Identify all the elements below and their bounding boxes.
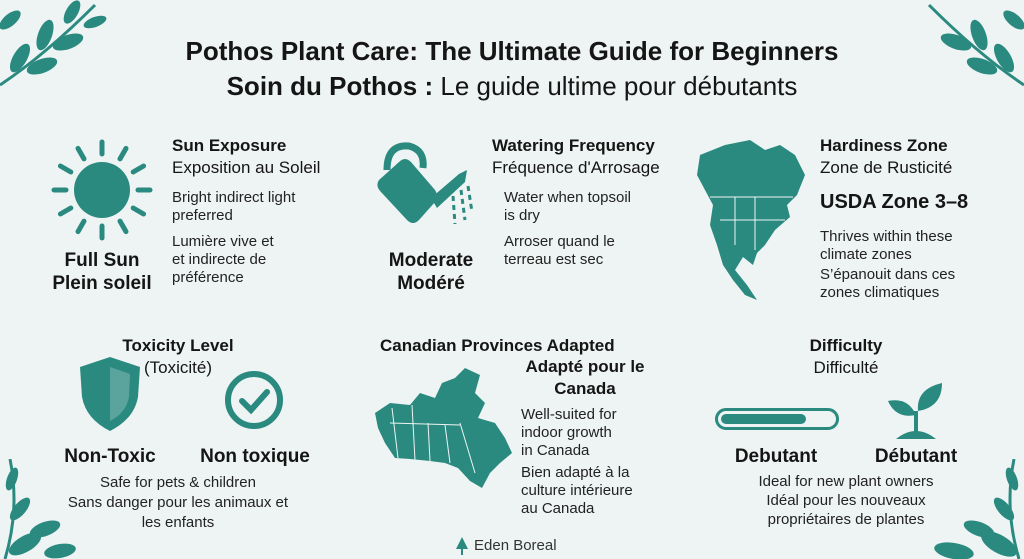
panel: sun exposure: préférence	[172, 269, 244, 286]
heading: Watering Frequency	[492, 136, 655, 155]
heading	[820, 136, 952, 177]
title: Pothos Plant Care: The Ultimate Guide for Beginners	[186, 36, 838, 66]
icon: sprout	[888, 383, 942, 439]
heading: (Toxicité)	[144, 358, 212, 377]
title	[186, 36, 838, 101]
label: full sun: Plein soleil	[52, 273, 152, 294]
panel: sun exposure: Lumière vive et	[172, 233, 274, 250]
panel: watering	[377, 136, 660, 294]
panel: hardiness zone: S’épanouit dans ces	[820, 266, 955, 283]
body text: propriétaires de plantes	[768, 511, 924, 528]
body text: is dry	[504, 207, 540, 224]
body text	[521, 406, 617, 459]
panel: watering: terreau est sec	[504, 251, 603, 268]
panel: canada: Adapté pour le	[525, 357, 644, 376]
heading: Fréquence d'Arrosage	[492, 158, 660, 177]
body text	[758, 473, 934, 528]
panel: canada: Canada	[554, 379, 616, 398]
panel: watering: Arroser quand le	[504, 233, 615, 250]
body text: Sans danger pour les animaux et	[68, 494, 288, 511]
panel: hardiness zone: zones climatiques	[820, 284, 939, 301]
heading	[810, 336, 882, 377]
body text: Well-suited for	[521, 406, 617, 423]
label: full sun	[52, 250, 152, 294]
panel: canada: Bien adapté à la	[521, 464, 629, 481]
panel: canada	[375, 336, 644, 517]
zone value: USDA Zone 3–8	[820, 191, 968, 213]
icon: sun	[52, 140, 152, 240]
body text: Thrives within these	[820, 228, 953, 245]
panel: canada: culture intérieure	[521, 482, 633, 499]
decorative leaves: top-right	[928, 4, 1024, 86]
body text: Ideal for new plant owners	[758, 473, 934, 490]
heading: Toxicity Level	[122, 336, 234, 355]
decorative leaves: top-left	[0, 0, 106, 86]
body text: in Canada	[521, 442, 589, 459]
panel: sun exposure: et indirecte de	[172, 251, 266, 268]
body text: indoor growth	[521, 424, 612, 441]
heading: Sun Exposure	[172, 136, 286, 155]
body text: Safe for pets & children	[100, 474, 256, 491]
labels: Non-Toxic	[64, 446, 156, 467]
body text: les enfants	[142, 514, 214, 531]
title: Soin du Pothos : Le guide ultime pour débutants	[227, 71, 797, 101]
icon: tree	[456, 537, 468, 555]
body text: preferred	[172, 207, 233, 224]
panel: toxicity	[64, 336, 310, 531]
heading: Exposition au Soleil	[172, 158, 320, 177]
body text: Idéal pour les nouveaux	[766, 492, 926, 509]
panel: difficulty: Débutant	[875, 446, 957, 467]
progress bar	[715, 408, 839, 430]
labels: Debutant	[735, 446, 817, 467]
icon: check circle	[225, 371, 283, 429]
body text: climate zones	[820, 246, 912, 263]
label: moderate	[389, 250, 473, 294]
body text	[504, 189, 631, 224]
icon: canada map	[375, 368, 512, 488]
body text: Water when topsoil	[504, 189, 631, 206]
panel: sun exposure	[52, 136, 320, 294]
label: moderate: Modéré	[397, 273, 465, 294]
body text	[172, 189, 296, 224]
body text: Bright indirect light	[172, 189, 295, 206]
heading: Hardiness Zone	[820, 136, 948, 155]
heading: Difficulté	[814, 358, 878, 377]
heading	[122, 336, 234, 377]
heading	[172, 136, 320, 177]
panel: difficulty	[715, 336, 957, 528]
icon: watering can	[377, 142, 473, 224]
heading: Zone de Rusticité	[820, 158, 952, 177]
icon: north america map	[697, 140, 805, 300]
panel: canada: au Canada	[521, 500, 594, 517]
icon: shield	[80, 357, 140, 431]
decorative leaves: bottom-right	[934, 459, 1020, 559]
decorative leaves: bottom-left	[4, 459, 76, 559]
body text	[820, 228, 953, 263]
heading	[492, 136, 660, 177]
heading: Canadian Provinces Adapted	[380, 336, 615, 355]
heading: Difficulty	[810, 336, 882, 355]
footer: brand: Eden Boreal	[474, 537, 557, 554]
body text	[68, 474, 288, 531]
label: moderate: Moderate	[389, 250, 473, 271]
panel: hardiness zone	[697, 136, 968, 301]
panel: toxicity: Non toxique	[200, 446, 310, 467]
label: full sun: Full Sun	[65, 250, 139, 271]
